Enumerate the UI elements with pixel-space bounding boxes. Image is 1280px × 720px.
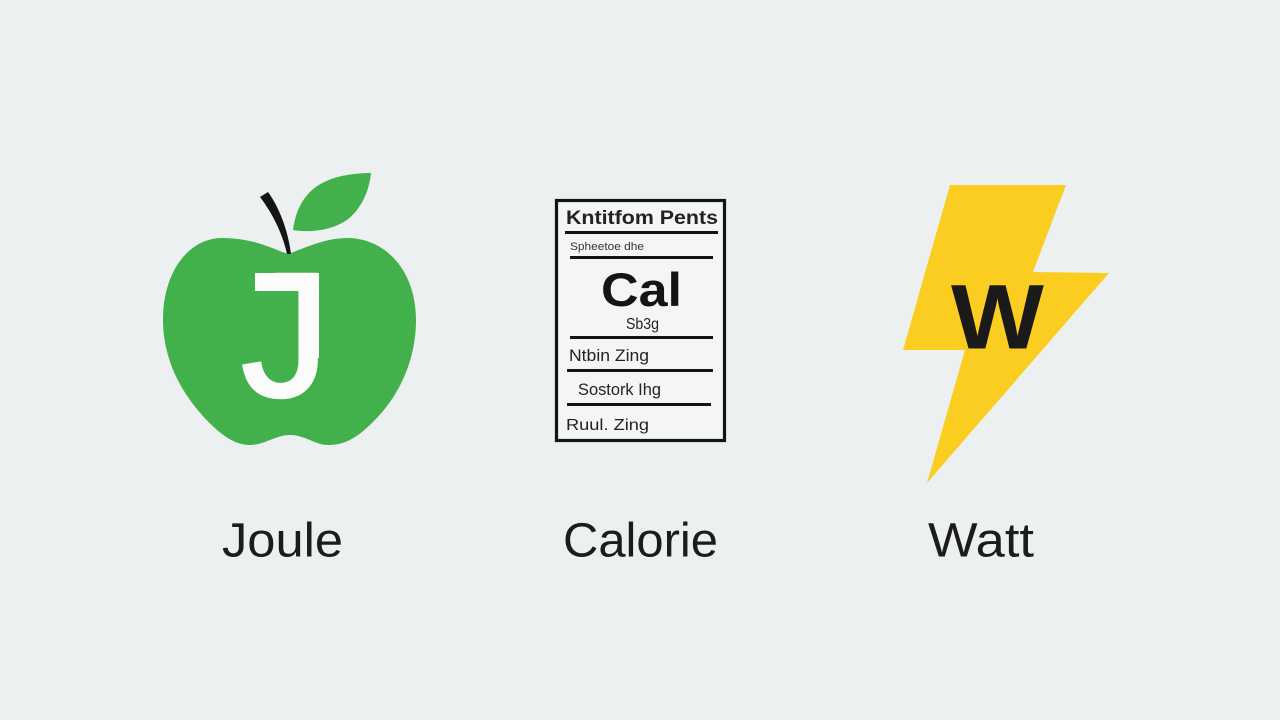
label: Joule: Joule	[222, 514, 343, 568]
panel: watt	[903, 185, 1109, 568]
label small line: Spheetoe dhe	[570, 241, 644, 253]
label row 3: Ruul. Zing	[566, 417, 649, 434]
apple stem	[260, 192, 291, 254]
panel: joule	[163, 173, 416, 568]
label row 1: Ntbin Zing	[569, 346, 649, 365]
label serving: Sb3g	[626, 316, 659, 333]
label big Cal: Cal	[601, 263, 682, 316]
apple leaf	[293, 173, 371, 231]
icon: nutrition label	[556, 200, 724, 440]
icon: green apple	[163, 173, 416, 445]
label: Watt: Watt	[928, 514, 1034, 568]
label row 2: Sostork Ihg	[578, 380, 661, 399]
label heading: Kntitfom Pents	[566, 208, 718, 229]
panel: calorie	[556, 200, 724, 568]
letter J: J	[241, 236, 330, 434]
label: Calorie: Calorie	[563, 514, 718, 568]
letter W: W	[951, 266, 1044, 369]
icon: lightning bolt	[903, 185, 1109, 483]
